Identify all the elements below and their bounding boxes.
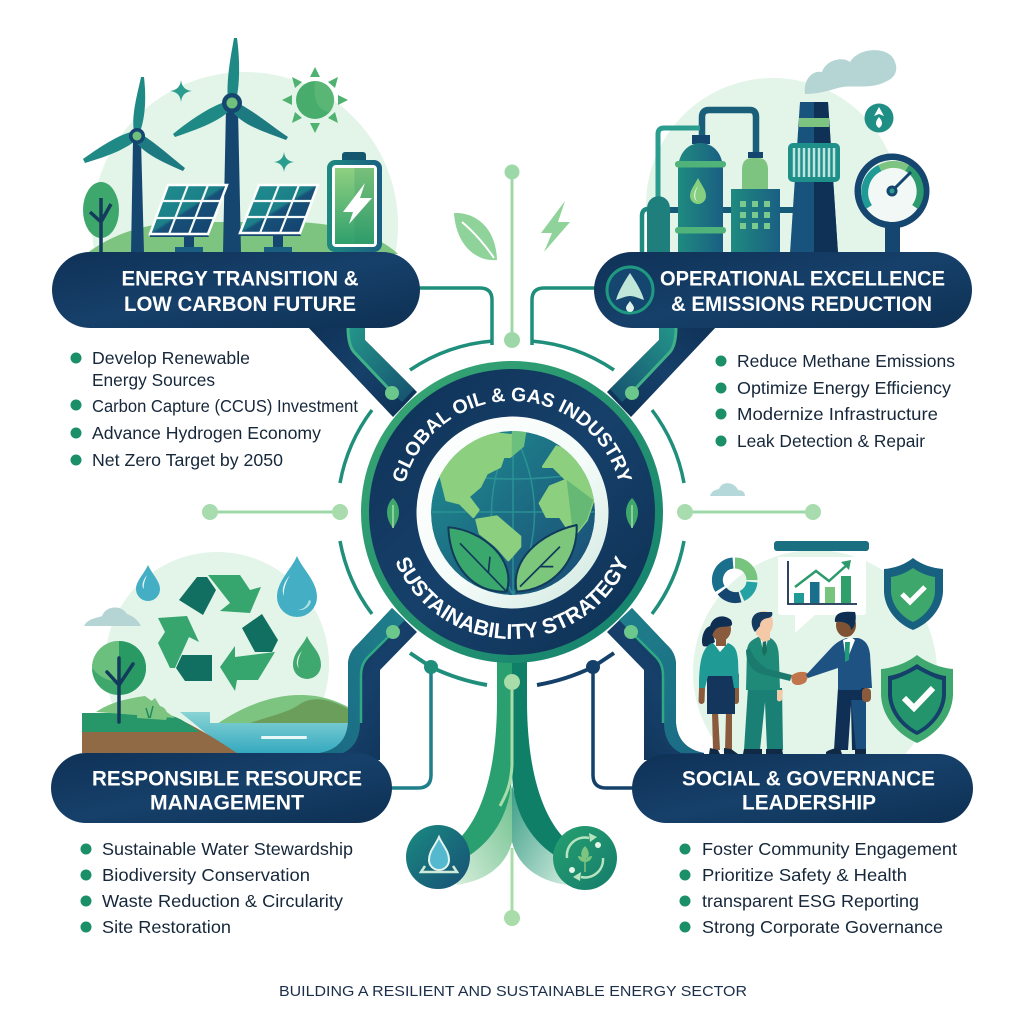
lake highlight [261, 736, 307, 739]
bullets: operational excellence: Optimize Energy Efficiency [737, 378, 951, 398]
smoke stack [788, 102, 840, 253]
leaf right [516, 525, 577, 592]
green water drop [293, 636, 321, 679]
pill: operational excellence: OPERATIONAL EXCELLENCE [660, 268, 945, 290]
small water drop [136, 565, 160, 601]
illustration: resource management [82, 552, 348, 753]
bullets: social and governance: transparent ESG Reporting [702, 891, 919, 911]
bottom shield [881, 655, 953, 743]
presentation bar [774, 541, 869, 551]
bullets: energy transition [70, 348, 358, 470]
illustration: refinery and emissions [640, 50, 930, 252]
man in green suit [743, 611, 792, 754]
small cloud [710, 483, 745, 496]
arm: upper left [307, 326, 417, 417]
recycle symbol [158, 575, 278, 691]
icon: circular economy badge [553, 826, 617, 890]
ring text bottom: SUSTAINABILITY STRATEGY [396, 555, 627, 639]
wind turbine small [83, 77, 185, 253]
donut chart [717, 563, 752, 598]
man in blue suit [806, 612, 872, 754]
ground [82, 696, 237, 753]
pale backdrop circle [693, 551, 937, 754]
battery [327, 152, 382, 252]
solar panel right [239, 185, 318, 253]
bullets: energy transition: Net Zero Target by 2050 [92, 450, 283, 470]
vertical top connector [504, 164, 520, 348]
bullets: operational excellence: Modernize Infrastructure [737, 404, 938, 424]
pill: social and governance: LEADERSHIP [742, 792, 876, 814]
pill: social and governance: SOCIAL & GOVERNANCE [682, 768, 935, 790]
arm: lower left [320, 608, 417, 760]
green vessel [742, 152, 768, 192]
pill: energy transition: ENERGY TRANSITION & [122, 268, 358, 290]
pill: energy transition: LOW CARBON FUTURE [124, 293, 356, 316]
pill: social and governance [632, 754, 973, 823]
large water drop [277, 556, 317, 617]
green hills [86, 222, 398, 254]
lake [180, 712, 350, 753]
handshake [791, 672, 809, 685]
white ring [416, 416, 608, 608]
icon: flame badge [607, 267, 653, 313]
icon: floating bolt [541, 201, 570, 252]
bullets: energy transition: Develop Renewable [92, 348, 250, 368]
bullets: responsible resource: Waste Reduction & Circularity [102, 891, 343, 911]
main tank [675, 135, 726, 253]
lower connectors [390, 653, 634, 788]
sparkles [170, 80, 294, 172]
bullets: social and governance: Foster Community Engagement [702, 839, 957, 859]
pale backdrop circle [92, 72, 398, 252]
ring text top: GLOBAL OIL & GAS INDUSTRY [393, 388, 632, 482]
icon: water badge [406, 825, 470, 889]
sun [282, 67, 348, 133]
arm: lower right [607, 608, 704, 760]
pipes [642, 110, 800, 253]
upper connectors [412, 288, 596, 345]
bullets: responsible resource: Site Restoration [102, 917, 231, 937]
pill: responsible resource: RESPONSIBLE RESOURCE [92, 768, 362, 790]
globe [431, 430, 595, 595]
pill: operational excellence [594, 252, 972, 328]
pill: responsible resource: MANAGEMENT [150, 792, 304, 814]
presentation board [778, 557, 866, 633]
pale backdrop circle [646, 78, 889, 252]
ring leaf left [387, 498, 399, 528]
control building [731, 189, 780, 253]
smoke cloud [805, 50, 896, 94]
central emblem [361, 361, 663, 663]
footer tagline: BUILDING A RESILIENT AND SUSTAINABLE ENERGY SECTOR [279, 983, 747, 1000]
small tank [647, 196, 670, 253]
bullets: responsible resource: Sustainable Water Stewardship [102, 839, 353, 859]
pressure gauge [854, 154, 930, 253]
concentric connector arcs [340, 341, 684, 614]
wind turbine large [173, 38, 288, 253]
small alert badge [864, 104, 894, 132]
horizontal left connector [202, 504, 348, 520]
bullets: operational excellence: Reduce Methane Emissions [737, 351, 955, 371]
bullets: responsible resource: Biodiversity Conservation [102, 865, 310, 885]
pill: energy transition [52, 252, 420, 328]
stem: lower centre [456, 655, 568, 926]
pill: responsible resource [51, 753, 392, 823]
navy ring [369, 369, 655, 655]
bullets: energy transition: Energy Sources [92, 370, 215, 390]
bullets: operational excellence [716, 351, 955, 451]
outer ring [361, 361, 663, 663]
tree [83, 182, 119, 253]
arm: upper right [607, 326, 717, 417]
bullets: energy transition: Carbon Capture (CCUS) Investment [92, 396, 358, 416]
illustration: social and governance [693, 483, 953, 754]
bullets: energy transition: Advance Hydrogen Economy [92, 423, 321, 443]
bullets: social and governance: Strong Corporate Governance [702, 917, 943, 937]
top shield [884, 558, 943, 630]
icon: floating leaf [454, 213, 497, 260]
woman [698, 616, 739, 754]
ring leaf right [626, 498, 638, 528]
hills [217, 695, 350, 724]
bullets: operational excellence: Leak Detection & Repair [737, 431, 925, 451]
solar panel left [150, 185, 227, 253]
bullets: social and governance: Prioritize Safety & Health [702, 865, 907, 885]
leaf left [448, 527, 508, 592]
cloud [84, 607, 141, 626]
horizontal right connector [677, 504, 821, 520]
bullets: social and governance [680, 839, 957, 937]
illustration: energy transition [83, 38, 398, 254]
pill: operational excellence: & EMISSIONS REDUCTION [671, 293, 932, 316]
pale backdrop circle [107, 552, 329, 734]
tree [92, 641, 146, 722]
bullets: responsible resource [80, 839, 353, 937]
